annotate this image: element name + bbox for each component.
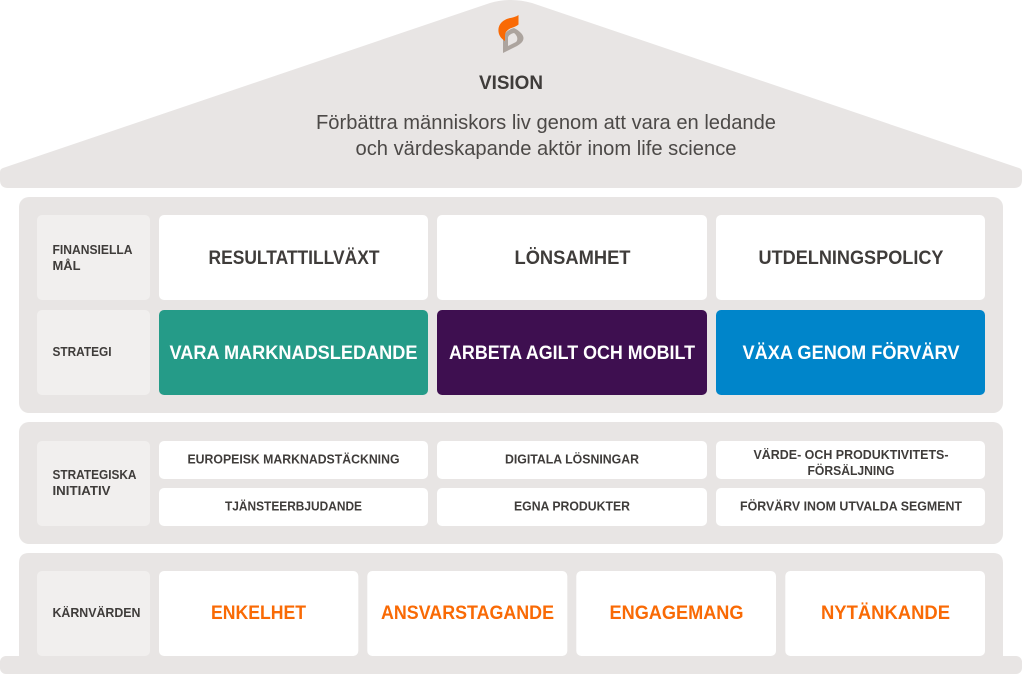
goal: resultattillväxt: RESULTATTILLVÄXT xyxy=(208,248,380,269)
strategy: växa genom förvärv: VÄXA GENOM FÖRVÄRV xyxy=(742,343,960,364)
value: enkelhet xyxy=(159,571,358,656)
initiative: förvärv inom utvalda segment: FÖRVÄRV INOM UTVALDA SEGMENT xyxy=(740,498,962,514)
label: strategiska initiativ xyxy=(37,441,150,526)
initiative: egna produkter: EGNA PRODUKTER xyxy=(514,498,631,514)
icon: logo xyxy=(498,15,524,53)
value: engagemang xyxy=(576,571,776,656)
strategy: arbeta agilt och mobilt xyxy=(437,310,707,395)
initiative: värde- och produktivitetsförsäljning: VÄRDE- OCH PRODUKTIVITETS- xyxy=(754,447,948,462)
vision text: Förbättra människors liv genom att vara en ledande xyxy=(316,112,776,134)
strategy: vara marknadsledande xyxy=(159,310,428,395)
initiative: digitala lösningar xyxy=(437,441,707,479)
panel: core values xyxy=(19,553,1003,660)
roof: vision xyxy=(0,0,1022,188)
label: finansiella mål: FINANSIELLA xyxy=(52,242,133,257)
panel background xyxy=(19,197,1003,413)
roof shape xyxy=(0,0,1022,188)
heading: vision: VISION xyxy=(479,73,543,94)
goal: utdelningspolicy xyxy=(716,215,985,300)
panel background xyxy=(19,553,1003,660)
goal: lönsamhet xyxy=(437,215,707,300)
initiative: europeisk marknadstäckning xyxy=(159,441,428,479)
initiative: digitala lösningar: DIGITALA LÖSNINGAR xyxy=(505,452,640,466)
label: strategiska initiativ: INITIATIV xyxy=(52,483,111,498)
base beam xyxy=(0,656,1022,674)
value: nytänkande: NYTÄNKANDE xyxy=(821,603,950,624)
initiative: värde- och produktivitetsförsäljning: FÖRSÄLJNING xyxy=(808,463,894,478)
label: finansiella mål xyxy=(37,215,150,300)
label: finansiella mål: MÅL xyxy=(52,258,81,273)
value: ansvarstagande xyxy=(367,571,567,656)
label: strategi xyxy=(37,310,150,395)
initiative: egna produkter xyxy=(437,488,707,526)
value: enkelhet: ENKELHET xyxy=(211,603,306,624)
value: engagemang: ENGAGEMANG xyxy=(610,603,744,624)
label: strategi: STRATEGI xyxy=(52,344,112,359)
initiative: europeisk marknadstäckning: EUROPEISK MARKNADSTÄCKNING xyxy=(188,452,400,466)
label: kärnvärden: KÄRNVÄRDEN xyxy=(52,605,140,620)
vision text: och värdeskapande aktör inom life science xyxy=(356,138,736,160)
panel: financial goals and strategy xyxy=(19,197,1003,413)
label: kärnvärden xyxy=(37,571,150,656)
initiative: värde- och produktivitetsförsäljning xyxy=(716,441,985,479)
initiative: tjänsteerbjudande xyxy=(159,488,428,526)
goal: resultattillväxt xyxy=(159,215,428,300)
strategy: arbeta agilt och mobilt: ARBETA AGILT OCH MOBILT xyxy=(449,343,695,364)
goal: lönsamhet: LÖNSAMHET xyxy=(514,248,631,269)
panel: strategic initiatives xyxy=(19,422,1003,544)
initiative: tjänsteerbjudande: TJÄNSTEERBJUDANDE xyxy=(225,498,362,514)
strategy: vara marknadsledande: VARA MARKNADSLEDANDE xyxy=(170,343,418,364)
goal: utdelningspolicy: UTDELNINGSPOLICY xyxy=(758,248,944,269)
value: nytänkande xyxy=(785,571,985,656)
label: strategiska initiativ: STRATEGISKA xyxy=(52,467,137,482)
panel background xyxy=(19,422,1003,544)
vision text xyxy=(316,112,776,160)
value: ansvarstagande: ANSVARSTAGANDE xyxy=(381,603,554,624)
initiative: förvärv inom utvalda segment xyxy=(716,488,985,526)
strategy: växa genom förvärv xyxy=(716,310,985,395)
